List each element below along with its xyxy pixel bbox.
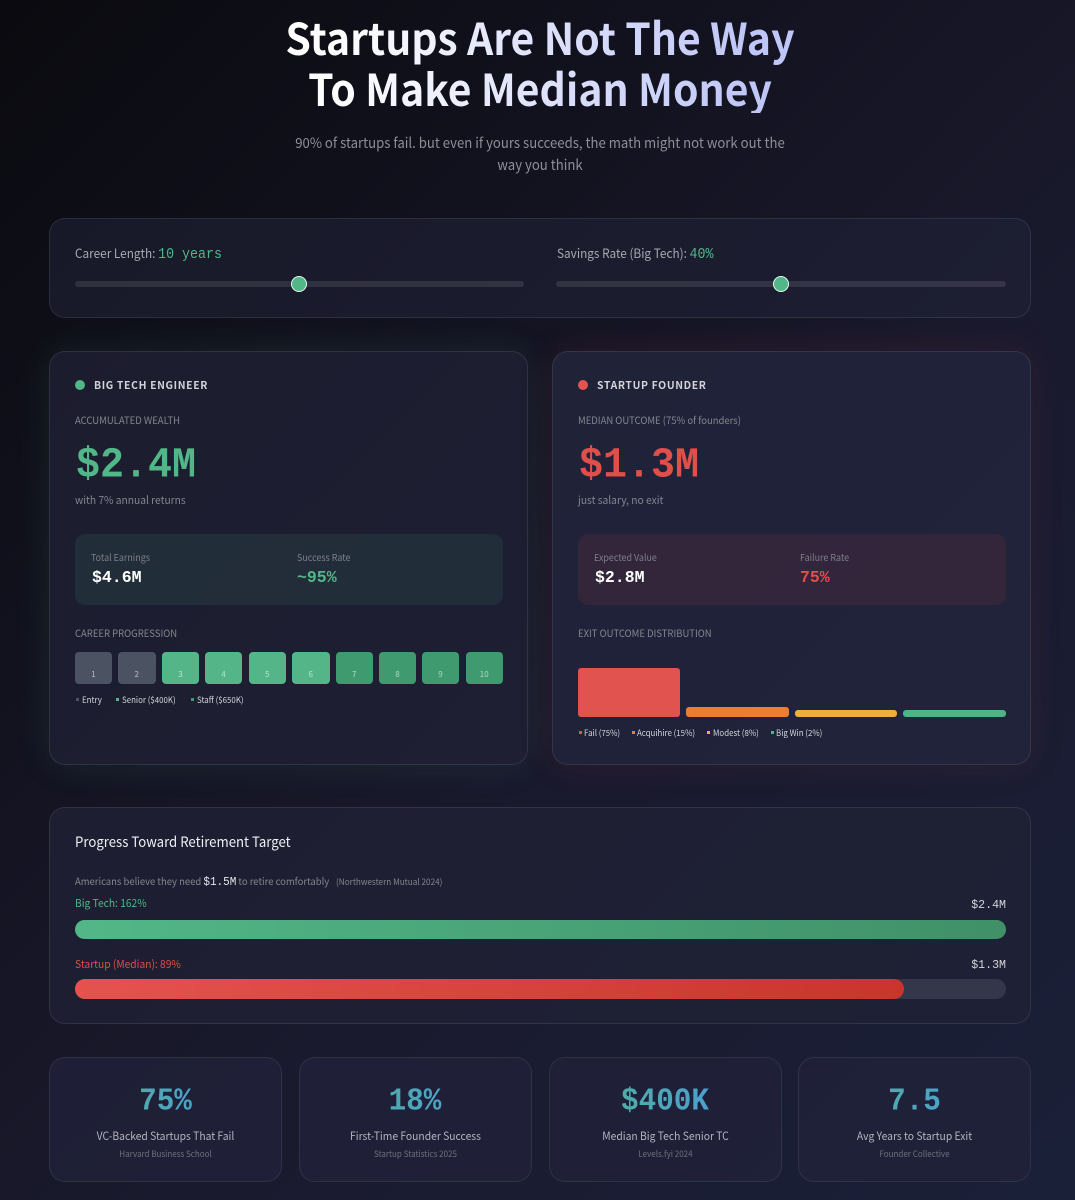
- panel: startup founder: [552, 351, 1031, 765]
- bar: modest: [794, 710, 897, 717]
- career progression blocks: 8: [395, 669, 400, 680]
- subtitle: way you think: [497, 155, 583, 175]
- failure rate label: Failure Rate: [800, 550, 849, 564]
- expected value label: Expected Value: [594, 550, 657, 564]
- big number: wealth: $2.4M: [76, 443, 196, 490]
- slider: savings rate: [556, 281, 1006, 287]
- career legend: Entry: [82, 694, 101, 706]
- exit outcome bar chart: [578, 668, 1006, 717]
- panel heading: BIG TECH ENGINEER: [94, 376, 208, 392]
- stat source: Levels.fyi 2024: [638, 1148, 692, 1160]
- wealth note: with 7% annual returns: [75, 492, 186, 508]
- subtitle: [295, 133, 785, 175]
- label: median outcome: MEDIAN OUTCOME (75% of founders): [578, 412, 741, 427]
- stat value: $400K: [621, 1084, 709, 1119]
- exit legend: Acquihire (15%): [637, 727, 695, 739]
- exit legend: Big Win (2%): [776, 727, 822, 739]
- label: exit distribution: EXIT OUTCOME DISTRIBUTION: [578, 625, 712, 640]
- career progression blocks: 5: [265, 669, 269, 680]
- stat value: [798, 1079, 1031, 1125]
- bar: acquihire: [686, 707, 788, 717]
- stat source: Harvard Business School: [119, 1148, 212, 1160]
- stat card: years to exit: [798, 1057, 1031, 1182]
- stat card: vc-backed failure: [49, 1057, 282, 1182]
- total earnings label: Total Earnings: [91, 550, 150, 564]
- slider thumb: [772, 276, 788, 292]
- stat value: 18%: [389, 1084, 441, 1119]
- big number: median outcome: $1.3M: [579, 443, 699, 490]
- target note: Americans believe they need $1.5M to retire comfortably (Northwestern Mutual 2024): [75, 873, 442, 889]
- stat source: Startup Statistics 2025: [374, 1148, 456, 1160]
- stat box: [578, 534, 1006, 605]
- big tech bar label: Big Tech: 162%: [75, 895, 147, 911]
- career progression blocks: 7: [352, 669, 356, 680]
- label: accumulated wealth: ACCUMULATED WEALTH: [75, 412, 180, 427]
- career progression blocks: 10: [480, 669, 489, 680]
- status dot: [578, 380, 588, 390]
- startup progress bar: [75, 979, 1006, 999]
- bar: big win: [903, 710, 1006, 717]
- startup bar value: $1.3M: [971, 959, 1006, 972]
- slider label: savings rate: Savings Rate (Big Tech): 40%: [556, 243, 713, 263]
- slider: career length: [74, 281, 524, 287]
- stat value: [548, 1079, 782, 1125]
- stat card: senior tc: [548, 1057, 782, 1182]
- status dot: [75, 380, 85, 390]
- career progression blocks: 2: [135, 669, 139, 680]
- stat value: 7.5: [888, 1084, 941, 1119]
- stat box: [75, 534, 503, 605]
- big tech bar value: $2.4M: [971, 899, 1006, 912]
- outcome note: just salary, no exit: [578, 492, 663, 508]
- slider thumb: [291, 276, 307, 292]
- panel heading: Progress Toward Retirement Target: [75, 832, 291, 852]
- title: Startups Are Not The Way: [285, 4, 795, 68]
- startup bar label: Startup (Median): 89%: [75, 956, 181, 972]
- career progression blocks: 6: [309, 669, 313, 680]
- career progression blocks: 4: [221, 669, 226, 680]
- stat value: [49, 1079, 282, 1125]
- title: To Make Median Money: [308, 55, 772, 119]
- title: [261, 11, 819, 113]
- label: career progression: CAREER PROGRESSION: [75, 625, 177, 640]
- panel: big tech engineer: [49, 351, 528, 765]
- total earnings value: $4.6M: [92, 568, 142, 587]
- career progression blocks: 9: [438, 669, 443, 680]
- startup progress fill: [75, 979, 904, 999]
- panel heading: STARTUP FOUNDER: [597, 376, 707, 392]
- career legend: Staff ($650K): [196, 694, 243, 706]
- stat source: Founder Collective: [879, 1148, 950, 1160]
- career legend: Senior ($400K): [122, 694, 176, 706]
- career legend: [76, 694, 243, 706]
- slider label: career length: Career Length: 10 years: [75, 243, 222, 263]
- subtitle: 90% of startups fail. but even if yours succeeds, the math might not work out the: [295, 133, 785, 153]
- stat label: Median Big Tech Senior TC: [602, 1128, 728, 1144]
- big tech progress bar: [75, 920, 1006, 939]
- career progression blocks: 3: [178, 669, 183, 680]
- failure rate value: 75%: [800, 568, 830, 587]
- success rate label: Success Rate: [297, 550, 350, 564]
- exit legend: Fail (75%): [584, 727, 620, 739]
- panel: sliders: [49, 218, 1031, 318]
- expected value: $2.8M: [595, 568, 645, 587]
- career progression blocks: 1: [91, 669, 96, 680]
- exit legend: [579, 727, 822, 739]
- success rate value: ~95%: [297, 568, 337, 587]
- stat value: [298, 1079, 532, 1125]
- panel: retirement progress: [49, 807, 1031, 1024]
- stat label: VC-Backed Startups That Fail: [97, 1128, 234, 1144]
- exit legend: Modest (8%): [713, 727, 759, 739]
- stat card: first-time founder: [298, 1057, 532, 1182]
- career progression blocks: [75, 652, 503, 684]
- stat value: 75%: [139, 1084, 192, 1119]
- stat label: First-Time Founder Success: [350, 1128, 480, 1144]
- bar: fail: [578, 668, 680, 717]
- stat label: Avg Years to Startup Exit: [857, 1128, 972, 1144]
